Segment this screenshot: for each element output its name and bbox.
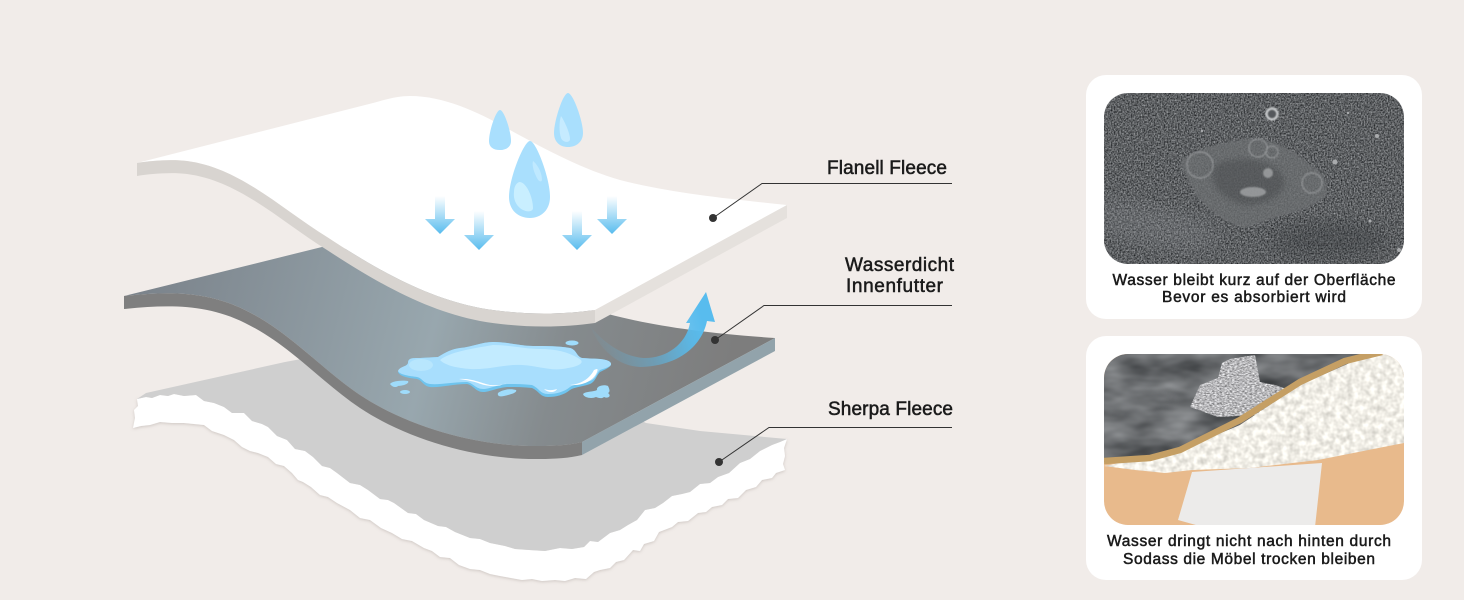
icon: down arrows xyxy=(425,196,627,250)
lining front edge xyxy=(124,293,582,459)
water puddle xyxy=(390,340,611,398)
panel: water stays on surface xyxy=(1077,75,1422,319)
icon: water drops xyxy=(489,93,583,218)
infographic: waterproof blanket layers xyxy=(124,75,1422,583)
drop large xyxy=(509,141,550,218)
callout: Wasserdicht Innenfutter xyxy=(711,255,955,344)
layer: flannel fleece xyxy=(137,96,787,327)
puddle splash drops xyxy=(390,340,610,398)
dot xyxy=(709,214,717,222)
arrow 2 xyxy=(464,211,494,250)
dot xyxy=(711,336,719,344)
photo: water beading on grey fabric xyxy=(1077,93,1404,264)
caption: Bevor es absorbiert wird xyxy=(1162,289,1346,306)
fleece front edge xyxy=(137,160,595,327)
leader line xyxy=(719,428,952,462)
drop right xyxy=(554,93,583,147)
photo: blanket corner turned back xyxy=(1104,352,1404,527)
label: Innenfutter xyxy=(846,276,944,297)
fleece right edge xyxy=(595,205,787,323)
arrow 4 xyxy=(597,196,627,234)
fleece top surface xyxy=(137,96,787,314)
leader line xyxy=(713,184,952,218)
layer: waterproof lining xyxy=(124,245,775,459)
puddle body xyxy=(398,342,611,394)
panel: water does not pass through xyxy=(1086,336,1422,580)
caption: Wasser dringt nicht nach hinten durch xyxy=(1107,533,1391,550)
layer: sherpa fleece xyxy=(133,350,787,581)
lining right edge xyxy=(582,338,775,455)
drop left xyxy=(489,110,511,150)
sherpa white fleece edge xyxy=(133,394,787,581)
sherpa grey inner surface xyxy=(137,350,787,551)
arrow 3 xyxy=(562,211,592,250)
dot xyxy=(715,458,723,466)
label: Sherpa Fleece xyxy=(828,399,953,420)
callout: Flanell Fleece xyxy=(709,158,952,222)
label: Flanell Fleece xyxy=(827,158,947,179)
panel card xyxy=(1086,75,1422,319)
puddle left lobe highlight xyxy=(409,359,433,371)
leader line xyxy=(715,306,952,340)
arrow 1 xyxy=(425,196,455,234)
caption: Sodass die Möbel trocken bleiben xyxy=(1123,551,1375,568)
puddle shine xyxy=(459,369,598,392)
puddle highlight xyxy=(440,345,582,369)
caption: Wasser bleibt kurz auf der Oberfläche xyxy=(1112,272,1396,289)
icon: curved evaporation arrow xyxy=(590,292,715,367)
lining top surface xyxy=(124,245,775,446)
label: Wasserdicht xyxy=(845,255,955,276)
callout: Sherpa Fleece xyxy=(715,399,953,466)
puddle outer rim xyxy=(398,342,611,397)
panel card xyxy=(1086,336,1422,580)
